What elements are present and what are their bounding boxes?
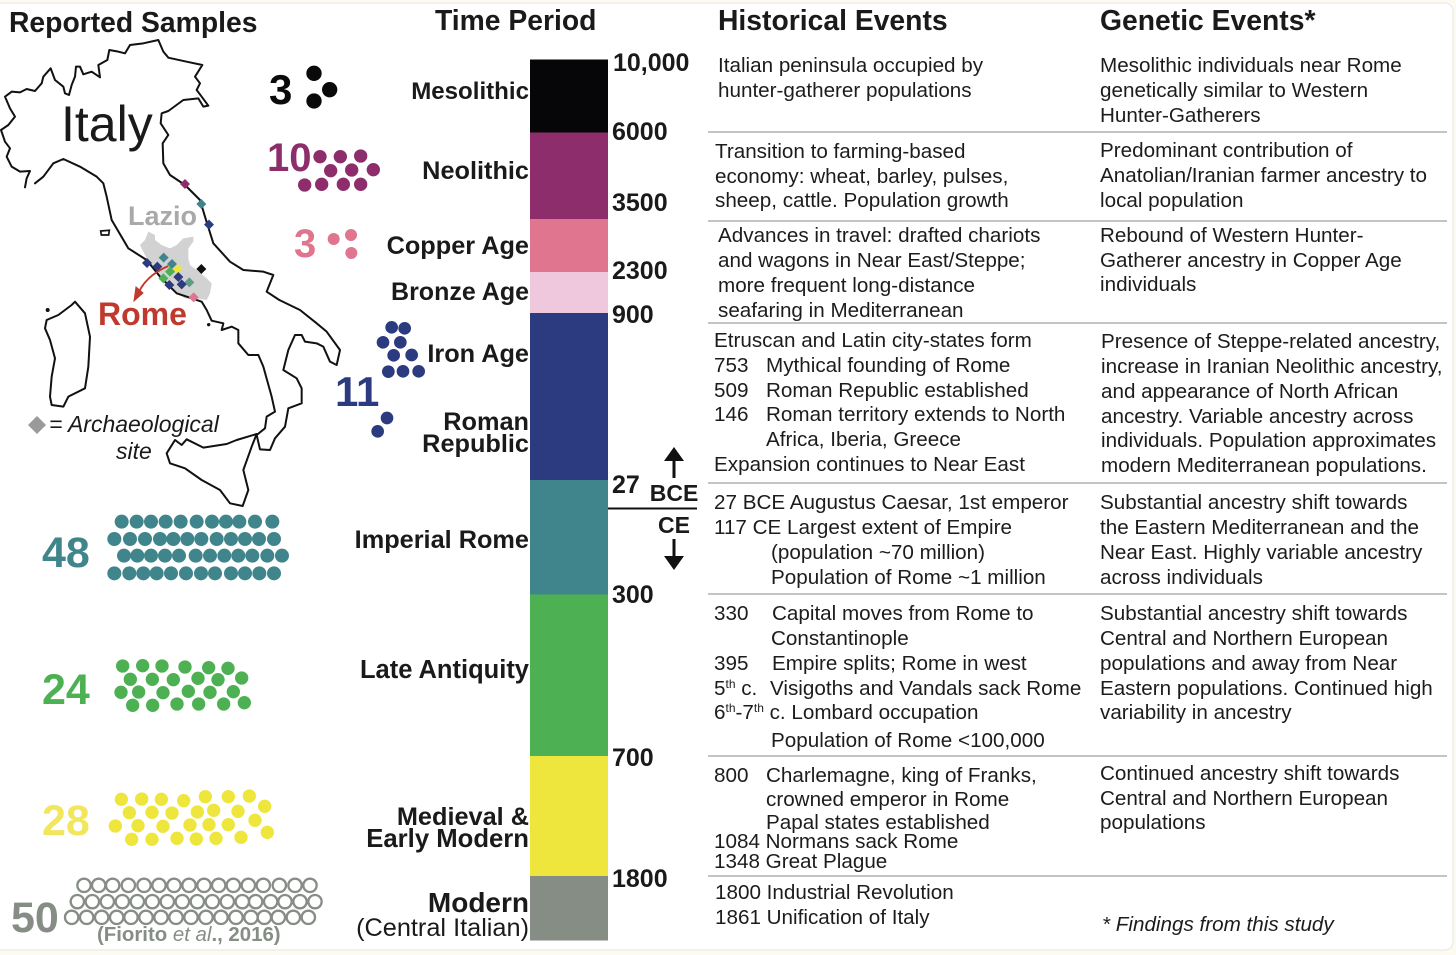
historical events: Imperial Rome bbox=[714, 491, 1069, 589]
historical events: Iron Age and Republic: Etruscan and Latin city-states form bbox=[714, 329, 1032, 352]
historical events: Imperial Rome: Population of Rome ~1 million bbox=[771, 566, 1046, 589]
BCE / CE divider: CE bbox=[658, 512, 690, 538]
genetic events: Mesolithic: Mesolithic individuals near Rome bbox=[1100, 54, 1402, 77]
BCE / CE divider: BCE bbox=[650, 480, 698, 506]
historical events: Medieval: Papal states established bbox=[766, 811, 990, 834]
genetic events: Imperial Rome: the Eastern Mediterranean and the bbox=[1100, 516, 1419, 539]
genetic events: Neolithic bbox=[1100, 139, 1427, 212]
historical events: Copper and Bronze Age: seafaring in Mediterranean bbox=[718, 299, 964, 322]
genetic events: Late Antiquity: populations and away from Near bbox=[1100, 652, 1397, 675]
heading: genetic events: Genetic Events* bbox=[1100, 4, 1315, 36]
historical events: Mesolithic: hunter-gatherer populations bbox=[718, 79, 972, 102]
historical events: Late Antiquity: 330 bbox=[714, 602, 748, 625]
historical events: Medieval: 800 bbox=[714, 764, 748, 787]
legend: archaeological site: = Archaeological bbox=[49, 411, 220, 437]
label: Rome: Rome bbox=[98, 296, 187, 332]
genetic events: Medieval: Continued ancestry shift towards bbox=[1100, 762, 1399, 785]
genetic events: Medieval bbox=[1100, 762, 1399, 834]
genetic events: Neolithic: local population bbox=[1100, 189, 1243, 212]
arrow up bbox=[664, 447, 684, 478]
historical events: Late Antiquity: Visigoths and Vandals sack Rome bbox=[770, 677, 1081, 700]
sample count: Late Antiquity 24 bbox=[42, 659, 251, 714]
historical events: Late Antiquity: Constantinople bbox=[771, 627, 909, 650]
genetic events: Imperial Rome: Near East. Highly variable ancestry bbox=[1100, 541, 1423, 564]
year labels: 6000 bbox=[612, 118, 668, 146]
period labels: Copper Age bbox=[387, 232, 529, 260]
historical events: Late Antiquity: th bbox=[725, 701, 736, 715]
historical events: Late Antiquity: Empire splits; Rome in west bbox=[772, 652, 1027, 675]
row dividers bbox=[708, 132, 1447, 876]
historical events: Copper and Bronze Age: and wagons in Near East/Steppe; bbox=[718, 249, 1026, 272]
historical events: Medieval: 1348 Great Plague bbox=[714, 850, 887, 873]
historical events: Neolithic: Transition to farming-based bbox=[715, 140, 965, 163]
timeline bar bbox=[530, 60, 608, 940]
genetic events: Late Antiquity: variability in ancestry bbox=[1100, 701, 1292, 724]
historical events: Iron Age and Republic: Roman Republic established bbox=[766, 379, 1029, 402]
historical events: Late Antiquity: c. bbox=[736, 677, 757, 700]
period labels: Medieval & bbox=[397, 803, 529, 831]
year labels: 2300 bbox=[612, 257, 668, 285]
historical events: Imperial Rome: 27 BCE Augustus Caesar, 1st emperor bbox=[714, 491, 1069, 514]
historical events: Mesolithic: Italian peninsula occupied by bbox=[718, 54, 984, 77]
year labels: 300 bbox=[612, 581, 654, 609]
historical events: Late Antiquity: 6 bbox=[714, 701, 725, 724]
period labels: Iron Age bbox=[427, 340, 529, 368]
genetic events: Neolithic: Predominant contribution of bbox=[1100, 139, 1353, 162]
sample count: Modern 50: 50 bbox=[11, 894, 59, 942]
genetic events: Neolithic: Anatolian/Iranian farmer ancestry to bbox=[1100, 164, 1427, 187]
period labels: Republic bbox=[422, 430, 529, 458]
genetic events: Copper and Bronze Age: Gatherer ancestry in Copper Age bbox=[1100, 249, 1402, 272]
genetic events: Medieval: populations bbox=[1100, 811, 1206, 834]
genetic events: Mesolithic: Hunter-Gatherers bbox=[1100, 104, 1261, 127]
sample count: Neolithic 10 bbox=[267, 136, 380, 192]
Sardinia outline bbox=[45, 302, 90, 407]
historical events: Modern: 1861 Unification of Italy bbox=[715, 906, 930, 929]
genetic events: Iron Age and Republic: Presence of Steppe-related ancestry, bbox=[1101, 330, 1440, 353]
historical events: Late Antiquity: 395 bbox=[714, 652, 748, 675]
historical events: Neolithic bbox=[715, 140, 1009, 212]
historical events: Late Antiquity: Population of Rome <100,000 bbox=[771, 729, 1045, 752]
legend: archaeological site bbox=[28, 411, 220, 464]
genetic events: Imperial Rome bbox=[1100, 491, 1423, 589]
sample count: Copper Age 3: 3 bbox=[294, 222, 316, 266]
sample count: Modern 50 bbox=[11, 879, 322, 946]
historical events: Late Antiquity bbox=[714, 602, 1081, 752]
BCE / CE divider bbox=[608, 447, 698, 570]
sample count: Mesolithic 3 bbox=[269, 66, 337, 113]
sample count: Late Antiquity 24: 24 bbox=[42, 666, 90, 714]
genetic events: Late Antiquity: Substantial ancestry shift towards bbox=[1100, 602, 1407, 625]
year labels: 3500 bbox=[612, 189, 668, 217]
genetic events: Late Antiquity: Eastern populations. Continued high bbox=[1100, 677, 1433, 700]
historical events: Neolithic: sheep, cattle. Population growth bbox=[715, 189, 1009, 212]
historical events: Medieval bbox=[714, 764, 1037, 873]
arrow to Rome bbox=[137, 266, 168, 298]
period labels: Mesolithic bbox=[411, 78, 529, 105]
historical events: Modern: 1800 Industrial Revolution bbox=[715, 881, 954, 904]
historical events: Imperial Rome: (population ~70 million) bbox=[771, 541, 985, 564]
sample count: Mesolithic 3: 3 bbox=[269, 66, 292, 113]
sample count: Iron Age and Roman Republic 11: 11 bbox=[335, 368, 379, 415]
mainland outline bbox=[1, 40, 340, 450]
sample count: Medieval 28 bbox=[42, 789, 274, 846]
genetic events: Iron Age and Republic bbox=[1101, 330, 1442, 477]
sample count: Imperial Rome 48: 48 bbox=[42, 529, 90, 577]
arrowhead to Rome bbox=[134, 287, 143, 301]
heading: reported samples: Reported Samples bbox=[9, 6, 257, 38]
legend: archaeological site: site bbox=[116, 438, 152, 464]
historical events: Late Antiquity: th bbox=[725, 677, 736, 691]
historical events: Iron Age and Republic bbox=[714, 329, 1065, 476]
footnote: * Findings from this study bbox=[1102, 913, 1335, 936]
map of Italy bbox=[1, 40, 340, 506]
genetic events: Imperial Rome: across individuals bbox=[1100, 566, 1263, 589]
historical events: Copper and Bronze Age bbox=[718, 224, 1040, 322]
genetic events: Late Antiquity bbox=[1100, 602, 1433, 724]
genetic events: Iron Age and Republic: ancestry. Variable ancestry across bbox=[1101, 405, 1413, 428]
genetic events: Mesolithic: genetically similar to Western bbox=[1100, 79, 1368, 102]
genetic events: Copper and Bronze Age bbox=[1100, 224, 1402, 296]
period labels: Roman bbox=[443, 408, 529, 436]
Lazio region bbox=[140, 232, 212, 300]
period labels: Late Antiquity bbox=[360, 656, 530, 684]
sample count: Modern 50: (Fiorito et al., 2016) bbox=[97, 924, 281, 946]
genetic events: Iron Age and Republic: modern Mediterranean populations. bbox=[1101, 454, 1427, 477]
label: Lazio: Lazio bbox=[128, 201, 197, 231]
sample count: Neolithic 10: 10 bbox=[267, 136, 312, 180]
historical events: Imperial Rome: 117 CE Largest extent of Empire bbox=[714, 516, 1012, 539]
genetic events: Copper and Bronze Age: Rebound of Western Hunter- bbox=[1100, 224, 1364, 247]
genetic events: Copper and Bronze Age: individuals bbox=[1100, 273, 1196, 296]
period labels bbox=[355, 78, 530, 942]
Sicily outline bbox=[167, 434, 257, 506]
historical events: Modern bbox=[715, 881, 954, 929]
genetic events: Medieval: Central and Northern European bbox=[1100, 787, 1388, 810]
period labels: Early Modern bbox=[366, 825, 529, 853]
arrow down bbox=[664, 539, 684, 570]
historical events: Late Antiquity: Capital moves from Rome to bbox=[772, 602, 1034, 625]
historical events: Iron Age and Republic: Mythical founding of Rome bbox=[766, 354, 1010, 377]
year labels: 10,000 bbox=[613, 49, 689, 77]
historical events: Iron Age and Republic: Expansion continues to Near East bbox=[714, 453, 1025, 476]
historical events: Late Antiquity: 5 bbox=[714, 677, 725, 700]
archaeological site diamonds bbox=[142, 179, 214, 302]
genetic events: Iron Age and Republic: increase in Iranian Neolithic ancestry, bbox=[1101, 355, 1442, 378]
historical events: Late Antiquity: c. Lombard occupation bbox=[764, 701, 978, 724]
year labels: 900 bbox=[612, 301, 654, 329]
genetic events: Iron Age and Republic: individuals. Population approximates bbox=[1101, 429, 1436, 452]
sample count: Copper Age 3 bbox=[294, 222, 357, 266]
historical events: Medieval: crowned emperor in Rome bbox=[766, 788, 1009, 811]
historical events: Late Antiquity: th bbox=[754, 701, 764, 715]
small islands bbox=[46, 230, 210, 326]
historical events: Medieval: Charlemagne, king of Franks, bbox=[766, 764, 1037, 787]
historical events: Iron Age and Republic: 753 bbox=[714, 354, 748, 377]
sample count: Iron Age and Roman Republic 11 bbox=[335, 321, 425, 438]
year labels: 1800 bbox=[612, 865, 668, 893]
period labels: Modern bbox=[428, 887, 529, 918]
historical events: Late Antiquity: -7 bbox=[736, 701, 754, 724]
heading: time period: Time Period bbox=[435, 4, 596, 36]
period labels: Imperial Rome bbox=[355, 526, 529, 554]
historical events: Iron Age and Republic: Roman territory extends to North bbox=[766, 403, 1065, 426]
period labels: Neolithic bbox=[422, 157, 529, 185]
historical events: Iron Age and Republic: 509 bbox=[714, 379, 748, 402]
sample count: Medieval 28: 28 bbox=[42, 797, 90, 845]
genetic events: Imperial Rome: Substantial ancestry shift towards bbox=[1100, 491, 1407, 514]
historical events: Copper and Bronze Age: more frequent long-distance bbox=[718, 274, 975, 297]
year labels: 27 bbox=[612, 471, 640, 499]
year labels: 700 bbox=[612, 744, 654, 772]
genetic events: Mesolithic bbox=[1100, 54, 1402, 127]
genetic events: Iron Age and Republic: and appearance of North African bbox=[1101, 380, 1398, 403]
historical events: Mesolithic bbox=[718, 54, 984, 102]
label: Italy: Italy bbox=[61, 96, 153, 152]
historical events: Copper and Bronze Age: Advances in travel: drafted chariots bbox=[718, 224, 1040, 247]
period labels: (Central Italian) bbox=[356, 914, 529, 942]
historical events: Iron Age and Republic: Africa, Iberia, Greece bbox=[766, 428, 961, 451]
historical events: Iron Age and Republic: 146 bbox=[714, 403, 748, 426]
period labels: Bronze Age bbox=[391, 278, 529, 306]
heading: historical events: Historical Events bbox=[718, 4, 948, 36]
historical events: Neolithic: economy: wheat, barley, pulses, bbox=[715, 165, 1008, 188]
sample count: Imperial Rome 48 bbox=[42, 515, 289, 580]
genetic events: Late Antiquity: Central and Northern European bbox=[1100, 627, 1388, 650]
historical events: Medieval: 1084 Normans sack Rome bbox=[714, 830, 958, 853]
year labels bbox=[612, 49, 689, 893]
